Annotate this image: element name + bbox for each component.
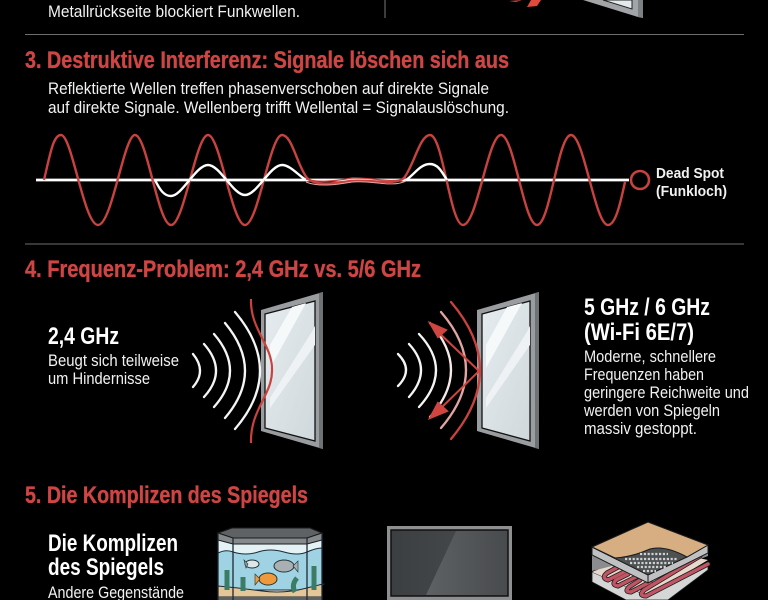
text: 2.4 GHz: um Hindernisse [48, 369, 150, 388]
text: 5 GHz / 6 GHz: werden von Spiegeln [583, 401, 720, 420]
text: accomplices intro: Die Komplizen [48, 530, 178, 557]
icon: 5 GHz waves, reflected arrows and mirror [398, 292, 539, 449]
icon: underfloor heating [592, 522, 708, 600]
text: accomplices intro: des Spiegels [48, 554, 164, 581]
text: 5 GHz / 6 GHz: Moderne, schnellere [584, 347, 716, 366]
panel: section 4 frequency problem [25, 256, 749, 449]
heading 3: 3. Destruktive Interferenz: Signale löschen sich aus [25, 47, 509, 74]
panel: section 2 remainder [48, 0, 643, 21]
text: accomplices intro [48, 530, 184, 600]
text: interference explanation: auf direkte Signale. Wellenberg trifft Wellental = Signalauslöschung. [48, 98, 509, 117]
panel: section 3 destructive interference [25, 47, 727, 225]
text: 5 GHz / 6 GHz: 5 GHz / 6 GHz [584, 294, 710, 321]
text: 5 GHz / 6 GHz: Frequenzen haben [584, 365, 704, 384]
text: 5 GHz / 6 GHz [583, 294, 749, 438]
icon: 2.4 GHz waves and mirror [193, 292, 323, 449]
text: 2.4 GHz: 2,4 GHz [48, 323, 119, 350]
chart: wave interference [36, 135, 649, 225]
text: interference explanation: Reflektierte Wellen treffen phasenverschoben auf direkte Signale [48, 79, 489, 98]
icon: aquarium [218, 528, 324, 600]
heading 5: 5. Die Komplizen des Spiegels [25, 482, 308, 509]
panel: section 5 accomplices [25, 482, 708, 600]
label: dead spot: (Funkloch) [656, 183, 727, 200]
label: dead spot: Dead Spot [656, 165, 724, 182]
text: 5 GHz / 6 GHz: (Wi-Fi 6E/7) [584, 319, 694, 346]
label: dead spot [656, 165, 727, 200]
icon: dead spot ring [631, 171, 649, 189]
icon: mirror bottom corner [509, 0, 643, 18]
icon: television [387, 526, 512, 600]
text: interference explanation [48, 79, 509, 117]
text: 2.4 GHz [48, 323, 179, 388]
text: 2.4 GHz: Beugt sich teilweise [48, 351, 179, 370]
heading 4: 4. Frequenz-Problem: 2,4 GHz vs. 5/6 GHz [25, 256, 421, 283]
text: 5 GHz / 6 GHz: massiv gestoppt. [584, 419, 697, 438]
text: metal backing: Metallrückseite blockiert Funkwellen. [48, 2, 300, 21]
